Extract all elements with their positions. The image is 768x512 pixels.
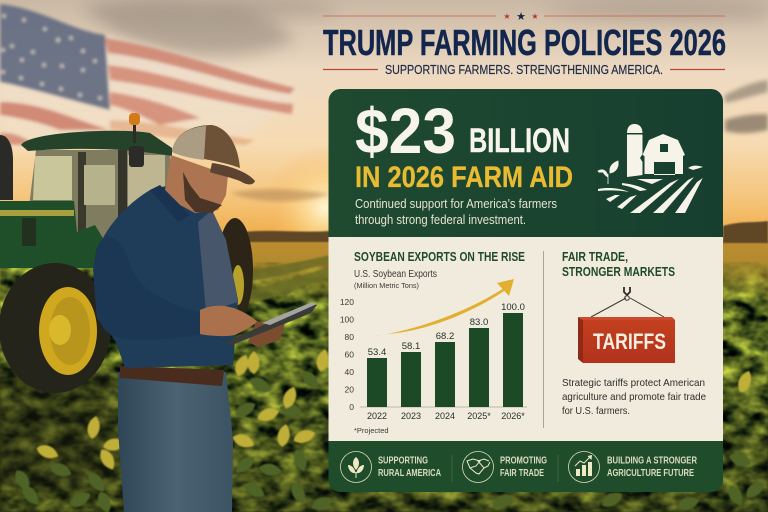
jeans xyxy=(118,372,233,512)
cap xyxy=(172,125,255,184)
label: stronger future: BUILDING A STRONGER xyxy=(607,456,698,466)
bar chart: 120 xyxy=(340,297,354,307)
shirt xyxy=(93,185,238,368)
background: american flag xyxy=(0,4,300,150)
bar chart: 2024 xyxy=(435,411,455,421)
icon: barn and fields xyxy=(598,124,703,213)
shirt placket xyxy=(198,210,238,312)
label: stronger future: AGRICULTURE FUTURE xyxy=(607,468,694,479)
bar chart xyxy=(340,297,527,421)
label: rural america: RURAL AMERICA xyxy=(378,468,441,479)
header ornament xyxy=(323,11,725,23)
belt xyxy=(120,366,224,386)
label: rural america xyxy=(378,456,441,479)
bar chart: 58.1 xyxy=(402,341,420,352)
subtitle: SUPPORTING FARMERS. STRENGTHENING AMERICA. xyxy=(385,63,663,77)
divider xyxy=(542,251,544,428)
bar chart: 2023 xyxy=(401,411,421,421)
bar chart: 0 xyxy=(349,402,354,412)
label: fair trade xyxy=(500,456,547,479)
icon: growth chart xyxy=(568,452,600,482)
shirt collar xyxy=(150,185,190,222)
bar chart: 100 xyxy=(340,314,354,324)
description: Continued support for America's farmers xyxy=(355,197,557,211)
description xyxy=(355,197,557,227)
header ornament: ★ xyxy=(503,12,511,21)
bar chart: 40 xyxy=(345,367,354,377)
neck and face xyxy=(165,155,228,213)
tariffs description xyxy=(562,377,706,417)
bar chart: 2026* xyxy=(501,411,525,421)
label: rural america: SUPPORTING xyxy=(378,456,428,466)
background: distant tree line xyxy=(243,221,768,243)
icon: hanging tariffs sign: TARIFFS xyxy=(593,329,666,354)
billion label: BILLION xyxy=(469,122,570,160)
beard xyxy=(183,172,222,213)
icon: hanging tariffs sign xyxy=(578,287,675,363)
icon: handshake xyxy=(462,452,494,482)
label: stronger future xyxy=(607,456,698,479)
bar chart: 68.2 xyxy=(436,331,454,342)
background: sunset sky xyxy=(0,0,768,270)
hands xyxy=(200,306,258,336)
background: soybean leaves xyxy=(12,348,768,512)
fair trade heading xyxy=(562,249,675,279)
bar chart: 20 xyxy=(345,384,354,394)
label: fair trade: PROMOTING xyxy=(500,456,547,466)
bar chart: 80 xyxy=(345,332,354,342)
panel: bottom banner xyxy=(328,441,723,492)
background: tractor xyxy=(0,113,253,393)
tariffs description: for U.S. farmers. xyxy=(562,405,630,417)
background: soybean field xyxy=(0,240,768,512)
header ornament: ★ xyxy=(516,11,526,23)
header ornament: ★ xyxy=(531,12,539,21)
bar chart: 53.4 xyxy=(368,347,386,358)
chart subtitle: U.S. Soybean Exports xyxy=(354,269,437,280)
fair trade heading: STRONGER MARKETS xyxy=(562,264,675,279)
tablet xyxy=(225,302,317,345)
panel: farm aid xyxy=(328,89,723,237)
tariffs description: agriculture and promote fair trade xyxy=(562,391,706,403)
farmer xyxy=(93,125,317,512)
icon: sprout xyxy=(340,452,372,482)
bar chart: 2022 xyxy=(367,411,387,421)
bar chart: 83.0 xyxy=(470,317,488,328)
bar chart: 100.0 xyxy=(501,302,525,313)
farm aid label: IN 2026 FARM AID xyxy=(355,161,573,194)
label: fair trade: FAIR TRADE xyxy=(500,468,544,479)
description: through strong federal investment. xyxy=(355,213,526,227)
chart subtitle xyxy=(354,269,437,290)
arrow: upward trend xyxy=(372,279,514,336)
tariffs description: Strategic tariffs protect American xyxy=(562,377,705,389)
chart subtitle: (Million Metric Tons) xyxy=(354,281,419,290)
bar chart: 60 xyxy=(345,350,354,360)
fair trade heading: FAIR TRADE, xyxy=(562,249,628,264)
panel: content card xyxy=(328,237,723,441)
chart heading: SOYBEAN EXPORTS ON THE RISE xyxy=(354,249,525,264)
bar chart: 2025* xyxy=(467,411,491,421)
sleeve xyxy=(94,237,200,340)
footnote: *Projected xyxy=(354,426,389,435)
amount: $23 xyxy=(355,95,456,167)
